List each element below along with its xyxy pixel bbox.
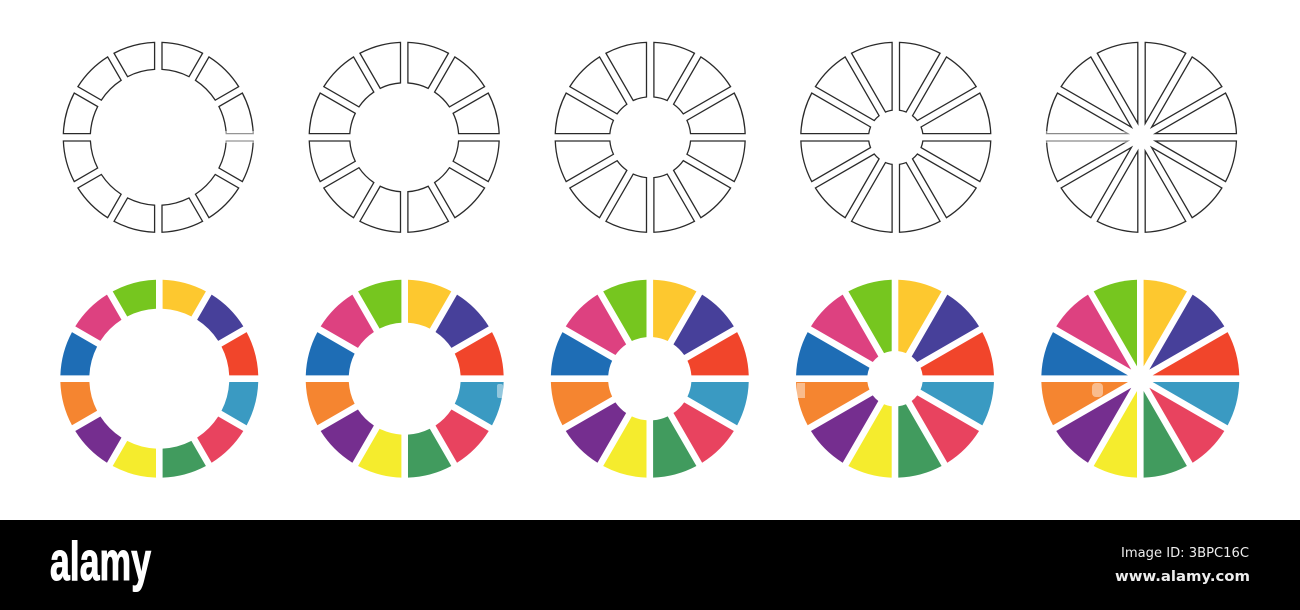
colour ring 3: thick ring [541,270,759,488]
outline ring 4: small-hole ring [791,33,1000,242]
outline ring 3: thick ring [546,33,755,242]
image id: Image ID: 3BPC16C [1121,545,1249,561]
outline ring 1: thin ring [54,33,263,242]
colour ring 4: small-hole ring [786,270,1004,488]
footer bar [0,520,1300,610]
colour ring 1: thin ring [50,270,268,488]
outline ring 5: pointed wedges [1037,33,1246,242]
colour ring 5: pointed wedges [1031,270,1249,488]
watermark traces [224,131,1130,398]
colour ring 2: medium ring [296,270,514,488]
outline ring 2: medium ring [300,33,509,242]
website url: www.alamy.com [1115,568,1250,585]
footer logo: alamy [50,530,151,592]
